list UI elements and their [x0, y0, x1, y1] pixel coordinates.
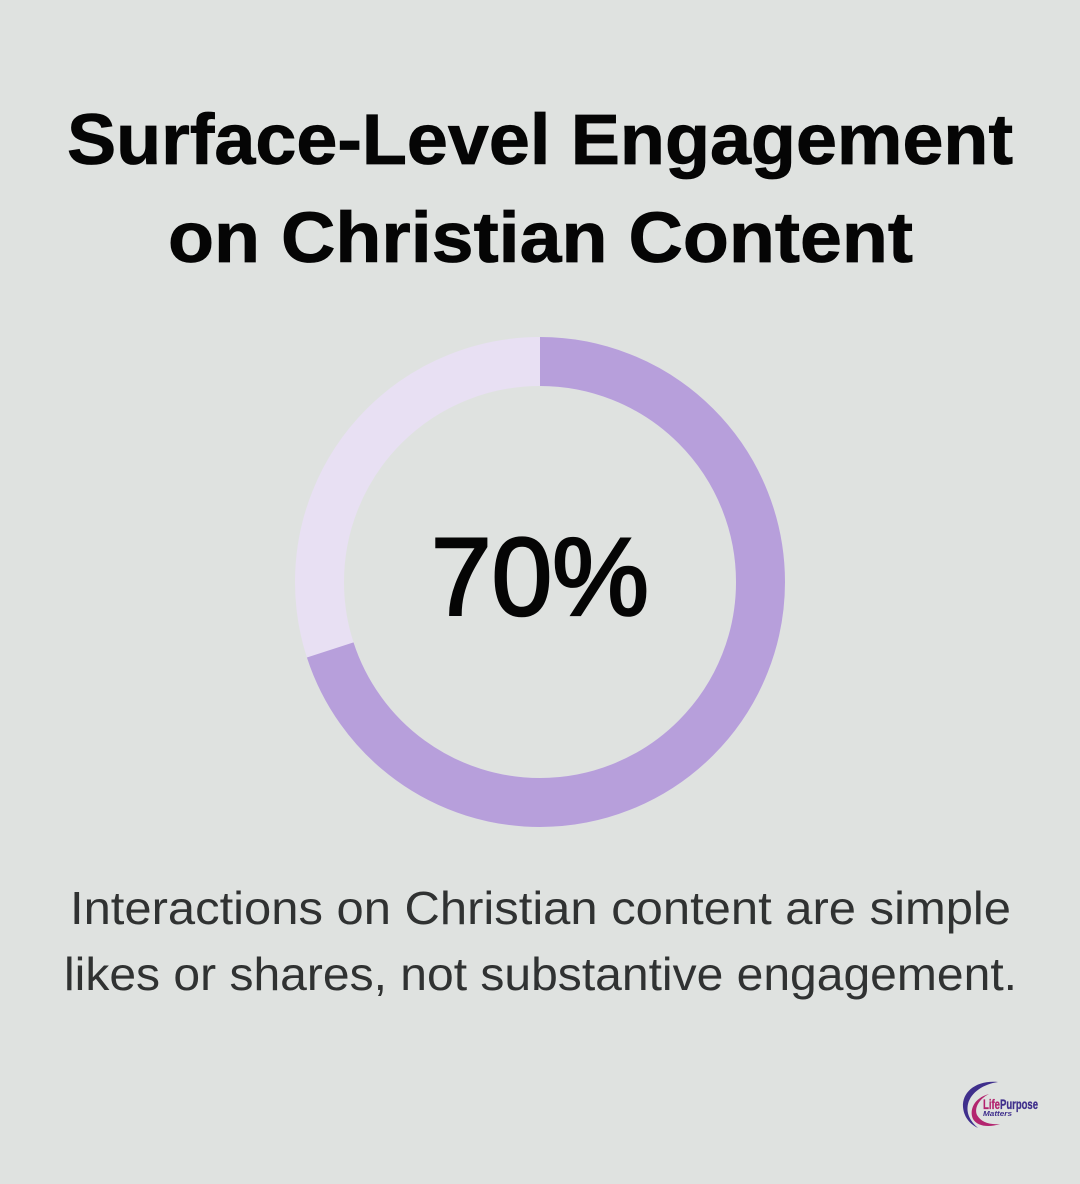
- logo: Life Purpose Matters: Purpose: [1000, 1097, 1038, 1112]
- description text: likes or shares, not substantive engagement.: [64, 948, 1017, 1000]
- description text: [64, 882, 1017, 1000]
- title: on Christian Content: [168, 199, 913, 278]
- logo: Life Purpose Matters: Matters: [983, 1109, 1012, 1118]
- logo outer swoosh: [963, 1082, 998, 1128]
- logo: Life Purpose Matters: [963, 1082, 1038, 1128]
- donut value arc: [320, 362, 760, 802]
- description text: Interactions on Christian content are simple: [70, 882, 1011, 934]
- logo wordmark: Life: [983, 1097, 1000, 1112]
- logo inner swoosh: [972, 1094, 1000, 1126]
- donut track: [320, 362, 760, 802]
- title: [67, 101, 1013, 278]
- percentage value: 70%: [431, 516, 649, 639]
- title: Surface-Level Engagement: [67, 101, 1013, 180]
- donut chart: 70%: [320, 362, 760, 802]
